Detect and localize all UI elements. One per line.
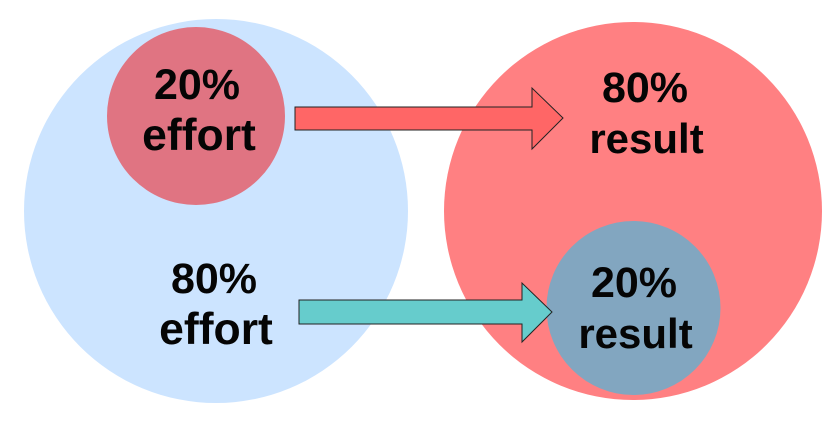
20% effort circle xyxy=(107,27,285,205)
80% result label: 80% xyxy=(602,64,688,112)
80% effort label: 80% xyxy=(171,255,257,303)
arrow: 20% effort to 80% result xyxy=(295,88,563,149)
20% effort circle: effort xyxy=(142,111,256,160)
20% result circle xyxy=(546,221,720,395)
arrow: 80% effort to 20% result xyxy=(299,283,552,342)
panel: effort circle xyxy=(24,19,408,403)
panel: result circle xyxy=(444,22,822,400)
80% result label: result xyxy=(589,115,704,162)
20% effort circle: 20% xyxy=(154,61,240,109)
80% effort label xyxy=(159,255,273,354)
20% result circle: 20% xyxy=(591,259,677,307)
80% effort label: effort xyxy=(159,305,273,354)
80% result label xyxy=(589,64,704,162)
20% result circle: result xyxy=(578,310,693,357)
